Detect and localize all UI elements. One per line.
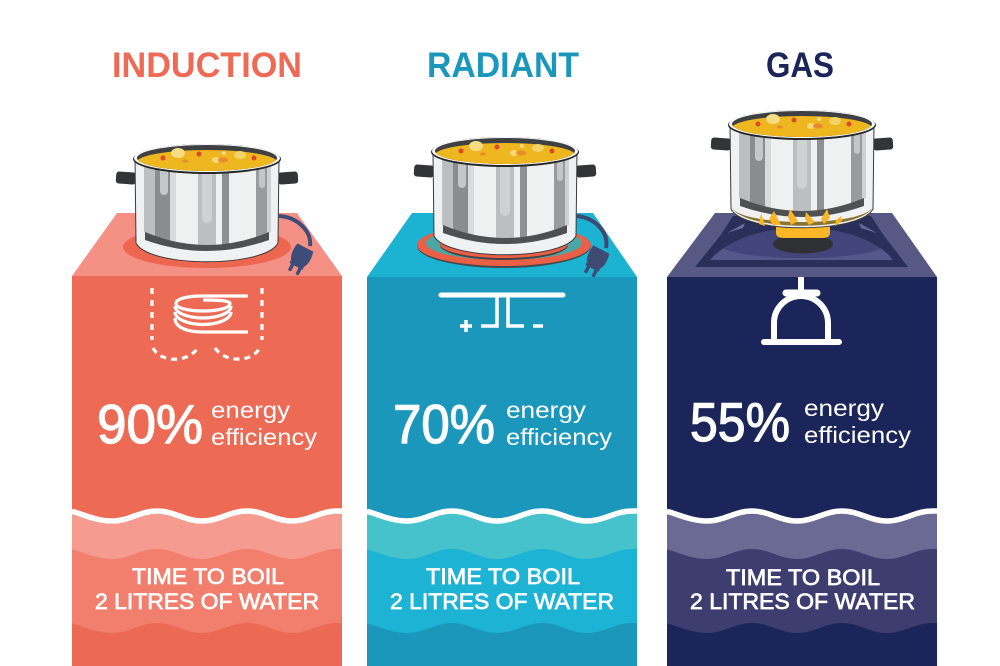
efficiency label: efficiency (506, 424, 613, 450)
boil time label: TIME TO BOIL (726, 565, 880, 590)
icon: power cord and plug (279, 216, 314, 277)
boil time label (690, 565, 915, 614)
boil time label: 2 LITRES OF WATER (690, 589, 915, 614)
boil time label: TIME TO BOIL (132, 564, 284, 589)
title: radiant: RADIANT (427, 46, 579, 85)
efficiency label (804, 395, 912, 448)
efficiency label (211, 397, 318, 450)
panel: induction (72, 46, 342, 666)
icon: induction coil (152, 288, 262, 359)
front face (367, 277, 637, 666)
radiant element rings (417, 224, 591, 268)
icon: cooking pot (116, 144, 298, 262)
efficiency label: energy (804, 395, 885, 421)
efficiency label: efficiency (211, 424, 318, 450)
boil time label (390, 564, 614, 614)
front face (72, 276, 342, 666)
efficiency label: energy (506, 397, 587, 423)
icon: gas bottle (764, 277, 839, 342)
icon: power cord and plug (577, 216, 610, 279)
cooktop top face (667, 213, 937, 277)
cooktop top face (367, 213, 637, 277)
panel: gas (667, 46, 937, 666)
flames (759, 209, 842, 226)
cooktop top face (72, 213, 342, 276)
panel: radiant (367, 46, 637, 666)
efficiency figure: 90% (97, 393, 203, 455)
gas burner (773, 224, 833, 254)
title: induction: INDUCTION (112, 46, 302, 85)
efficiency figure: 70% (393, 393, 495, 455)
boil time label (95, 564, 319, 614)
icon: cooking pot (711, 110, 893, 228)
pot scorch ring (731, 207, 873, 226)
boil time label: 2 LITRES OF WATER (95, 589, 319, 614)
water waves (667, 508, 937, 633)
gas grate (695, 215, 908, 267)
boil time label: 2 LITRES OF WATER (390, 589, 614, 614)
efficiency label (506, 397, 613, 450)
front face (667, 277, 937, 666)
efficiency figure: 55% (690, 391, 790, 453)
title: gas: GAS (766, 46, 834, 85)
icon: cooking pot (414, 137, 596, 255)
induction zone (123, 226, 291, 268)
boil time label: TIME TO BOIL (426, 564, 580, 589)
water waves (72, 508, 342, 633)
efficiency label: efficiency (804, 422, 912, 448)
water waves (367, 508, 637, 633)
efficiency label: energy (211, 397, 291, 423)
icon: radiant heating element (441, 295, 563, 332)
